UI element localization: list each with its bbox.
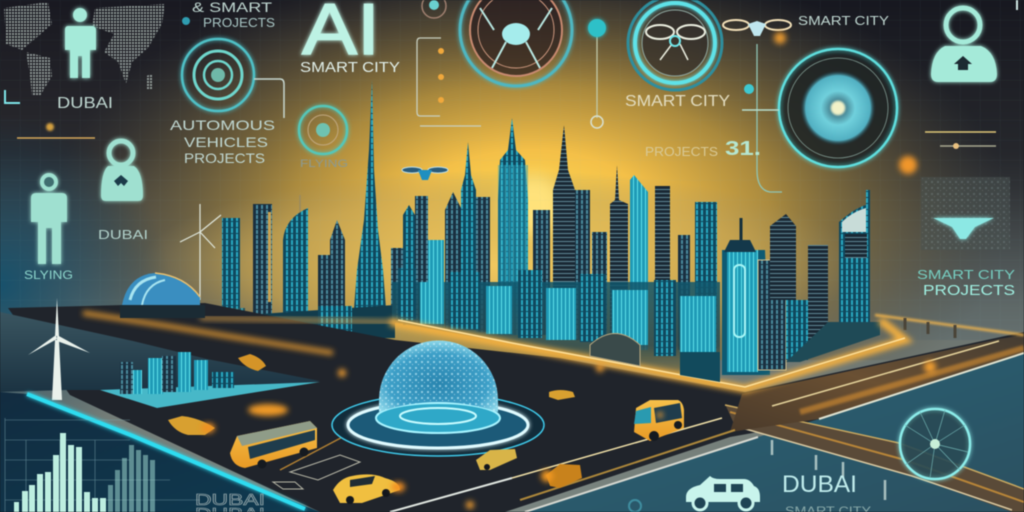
bus right	[634, 400, 684, 441]
heading fragment: & smart projects: PROJECTS	[203, 15, 275, 30]
road lens flares	[338, 361, 936, 509]
hologram dome	[332, 341, 544, 456]
car yellow front	[333, 474, 405, 504]
icon: autonomous vehicle ring	[182, 39, 284, 118]
label: autonomous vehicles projects	[170, 117, 275, 166]
icon: flying ring	[299, 106, 347, 154]
wind turbine	[28, 298, 90, 400]
drone centre	[402, 167, 448, 180]
subtitle: smart city: SMART CITY	[300, 59, 400, 76]
small orange flare	[899, 156, 917, 174]
bracket and small line	[5, 90, 95, 138]
label: slying: SLYING	[24, 268, 73, 282]
car middle	[476, 449, 517, 470]
label: flying: FLYING	[300, 158, 348, 170]
right towers	[722, 190, 880, 375]
car lower right	[541, 464, 582, 488]
label: smart city projects right	[917, 267, 1015, 299]
icon: drone top	[723, 20, 791, 192]
world map	[4, 2, 165, 96]
icon: data orb ring	[742, 49, 897, 167]
label: Dubai left: DUBAI	[98, 227, 148, 242]
city shoreline glow	[390, 320, 905, 389]
icon: person top left	[65, 8, 96, 78]
icon: person left	[31, 175, 67, 264]
connector bracket centre top	[417, 38, 481, 126]
car orange left	[168, 416, 215, 435]
small tick top right	[1016, 0, 1018, 10]
low-rise district	[200, 268, 720, 388]
car upper left	[238, 354, 266, 371]
small node bottom	[629, 500, 641, 512]
glowing waterfront base	[200, 318, 905, 387]
car road upper	[549, 390, 575, 400]
label: autonomous vehicles projects: VEHICLES	[184, 134, 268, 150]
label: Dubai bottom right: DUBAI	[782, 471, 857, 498]
heading fragment: & smart projects	[182, 0, 275, 30]
ground and roads	[0, 303, 1024, 512]
label: smart city projects right: PROJECTS	[923, 282, 1015, 299]
label: smart city projects right: SMART CITY	[917, 267, 1015, 282]
icon: drone ring	[628, 0, 722, 90]
label: smart city top right: SMART CITY	[798, 13, 889, 28]
centre towers	[391, 118, 717, 357]
skyline	[200, 80, 880, 388]
miniature city	[100, 352, 320, 408]
icon: car bottom	[686, 476, 760, 510]
bottom left panel with bar chart	[0, 392, 320, 512]
label: smart city middle: SMART CITY	[625, 93, 730, 110]
label: autonomous vehicles projects: PROJECTS	[184, 150, 265, 166]
icon: person bust left	[101, 141, 143, 201]
icon: person bust top right	[931, 8, 997, 82]
burj tower	[352, 80, 388, 335]
label: Dubai bottom left	[195, 492, 265, 512]
icon: small ring top	[422, 0, 446, 18]
stadium	[120, 273, 205, 318]
bus left	[230, 421, 317, 468]
icon: wheel hologram	[900, 409, 970, 479]
road markings	[273, 455, 360, 489]
left towers	[222, 195, 345, 330]
label: autonomous vehicles projects: AUTOMOUS	[170, 117, 275, 133]
icon: small teal node and connector	[588, 19, 606, 128]
data streaks right	[925, 132, 996, 149]
label: projects: PROJECTS	[645, 144, 718, 159]
hologram panel	[921, 177, 1010, 250]
label: 31.: 31.	[725, 138, 761, 160]
icon: thin wind turbine	[180, 204, 221, 300]
icon: insect ring	[460, 0, 572, 86]
label: Dubai bottom left: DUBAI	[195, 492, 265, 509]
label: Dubai top left: DUBAI	[57, 95, 113, 112]
